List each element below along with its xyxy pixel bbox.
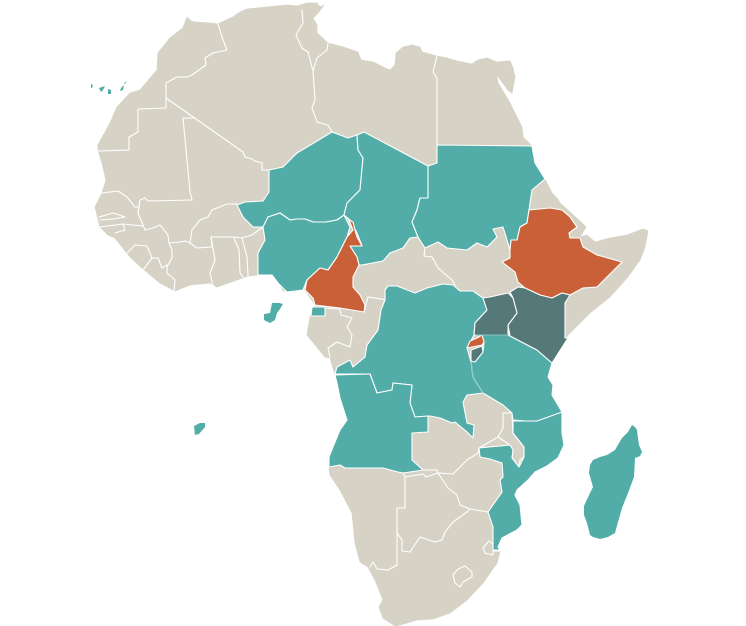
orange highlighted countries (305, 208, 622, 348)
Malawi (498, 413, 524, 467)
faint borders between same-colour countries (471, 335, 508, 393)
teal highlighted countries (194, 132, 642, 550)
Sao Tome island (194, 423, 205, 435)
Angola (329, 374, 428, 473)
dark teal highlighted countries (471, 287, 570, 363)
continent base landmass (95, 3, 648, 626)
Burundi (471, 346, 483, 362)
Madagascar (584, 425, 642, 539)
Democratic Republic of the Congo (335, 284, 487, 438)
Lesotho (453, 566, 472, 587)
Uganda (474, 293, 517, 335)
Mozambique (479, 412, 564, 550)
Cameroon (305, 220, 365, 312)
Equatorial Guinea (311, 307, 325, 316)
Rwanda (467, 335, 484, 348)
Niger (237, 132, 363, 227)
Nigeria (258, 213, 350, 292)
Eswatini (483, 541, 494, 555)
Ethiopia (502, 208, 622, 298)
Kenya (508, 287, 570, 363)
Bioko island (264, 303, 283, 323)
country borders on beige land (98, 10, 500, 570)
Cape Verde islands (91, 81, 127, 94)
Tanzania (471, 335, 562, 422)
Chad (344, 132, 428, 265)
Sudan (412, 145, 545, 250)
